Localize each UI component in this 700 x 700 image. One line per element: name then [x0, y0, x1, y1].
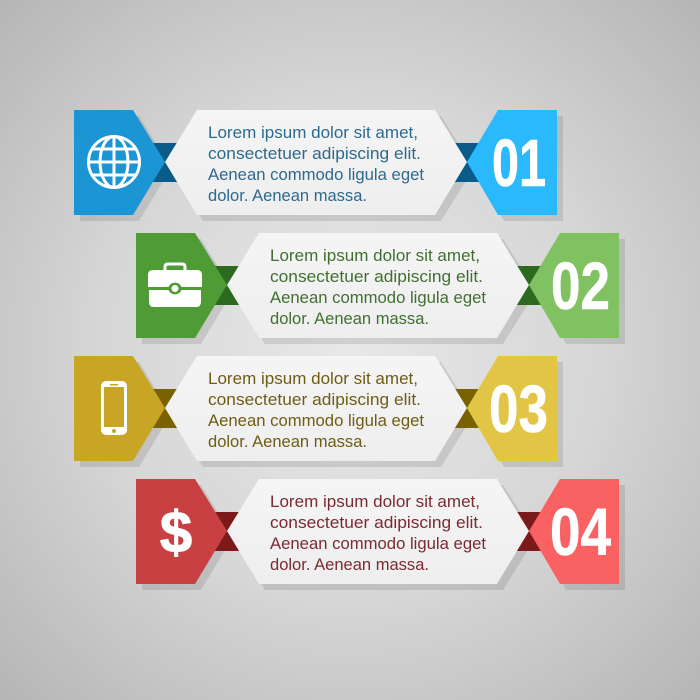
row 2 body text: Aenean commodo ligula eget — [270, 288, 486, 307]
row 2 shadow — [142, 239, 625, 344]
row 3 number: 03 — [489, 372, 548, 447]
row 4 right connector — [514, 512, 544, 551]
row 2 body text: dolor. Aenean massa. — [270, 309, 429, 328]
icon: globe — [88, 136, 140, 188]
row 3 right connector — [452, 389, 482, 428]
row 2 right box — [529, 233, 619, 338]
icon: briefcase — [148, 264, 202, 307]
row 3 shadow — [80, 362, 563, 467]
row 4 body text — [270, 492, 486, 574]
row 1 body text: Aenean commodo ligula eget — [208, 165, 424, 184]
row 2 body text: consectetuer adipiscing elit. — [270, 267, 483, 286]
row 2 body text — [270, 246, 486, 328]
panel: row 3 — [74, 356, 563, 467]
row 2 left connector — [212, 266, 242, 305]
panel: row 4 — [136, 479, 625, 590]
row 2 text panel — [227, 233, 529, 338]
row 3 left box — [74, 356, 165, 461]
row 3 right box — [467, 356, 557, 461]
row 3 text panel — [165, 356, 467, 461]
row 4 number: 04 — [550, 495, 611, 570]
row 4 text panel — [227, 479, 529, 584]
row 1 body text: Lorem ipsum dolor sit amet, — [208, 123, 418, 142]
icon: dollar sign: $ — [160, 500, 192, 565]
row 1 body text: consectetuer adipiscing elit. — [208, 144, 421, 163]
row 2 body text: Lorem ipsum dolor sit amet, — [270, 246, 480, 265]
row 4 body text: dolor. Aenean massa. — [270, 555, 429, 574]
row 1 body text — [208, 123, 424, 205]
row 1 body text: dolor. Aenean massa. — [208, 186, 367, 205]
row 2 number: 02 — [551, 249, 610, 324]
row 3 body text: Lorem ipsum dolor sit amet, — [208, 369, 418, 388]
row 1 left connector — [150, 143, 180, 182]
row 4 left connector — [212, 512, 242, 551]
row 4 body text: Aenean commodo ligula eget — [270, 534, 486, 553]
row 1 text panel — [165, 110, 467, 215]
panel: row 1 — [74, 110, 563, 221]
row 4 left box — [136, 479, 227, 584]
row 4 right box — [529, 479, 619, 584]
row 2 left box — [136, 233, 227, 338]
panel: row 2 — [136, 233, 625, 344]
row 1 left box — [74, 110, 165, 215]
row 3 body text — [208, 369, 424, 451]
row 3 left connector — [150, 389, 180, 428]
row 3 body text: consectetuer adipiscing elit. — [208, 390, 421, 409]
row 1 right connector — [452, 143, 482, 182]
row 3 body text: dolor. Aenean massa. — [208, 432, 367, 451]
row 4 body text: Lorem ipsum dolor sit amet, — [270, 492, 480, 511]
row 3 body text: Aenean commodo ligula eget — [208, 411, 424, 430]
row 2 right connector — [514, 266, 544, 305]
icon: smartphone — [101, 381, 127, 435]
row 4 shadow — [142, 485, 625, 590]
row 1 right box — [467, 110, 557, 215]
row 1 number: 01 — [492, 126, 546, 201]
row 1 shadow — [80, 116, 563, 221]
row 4 body text: consectetuer adipiscing elit. — [270, 513, 483, 532]
